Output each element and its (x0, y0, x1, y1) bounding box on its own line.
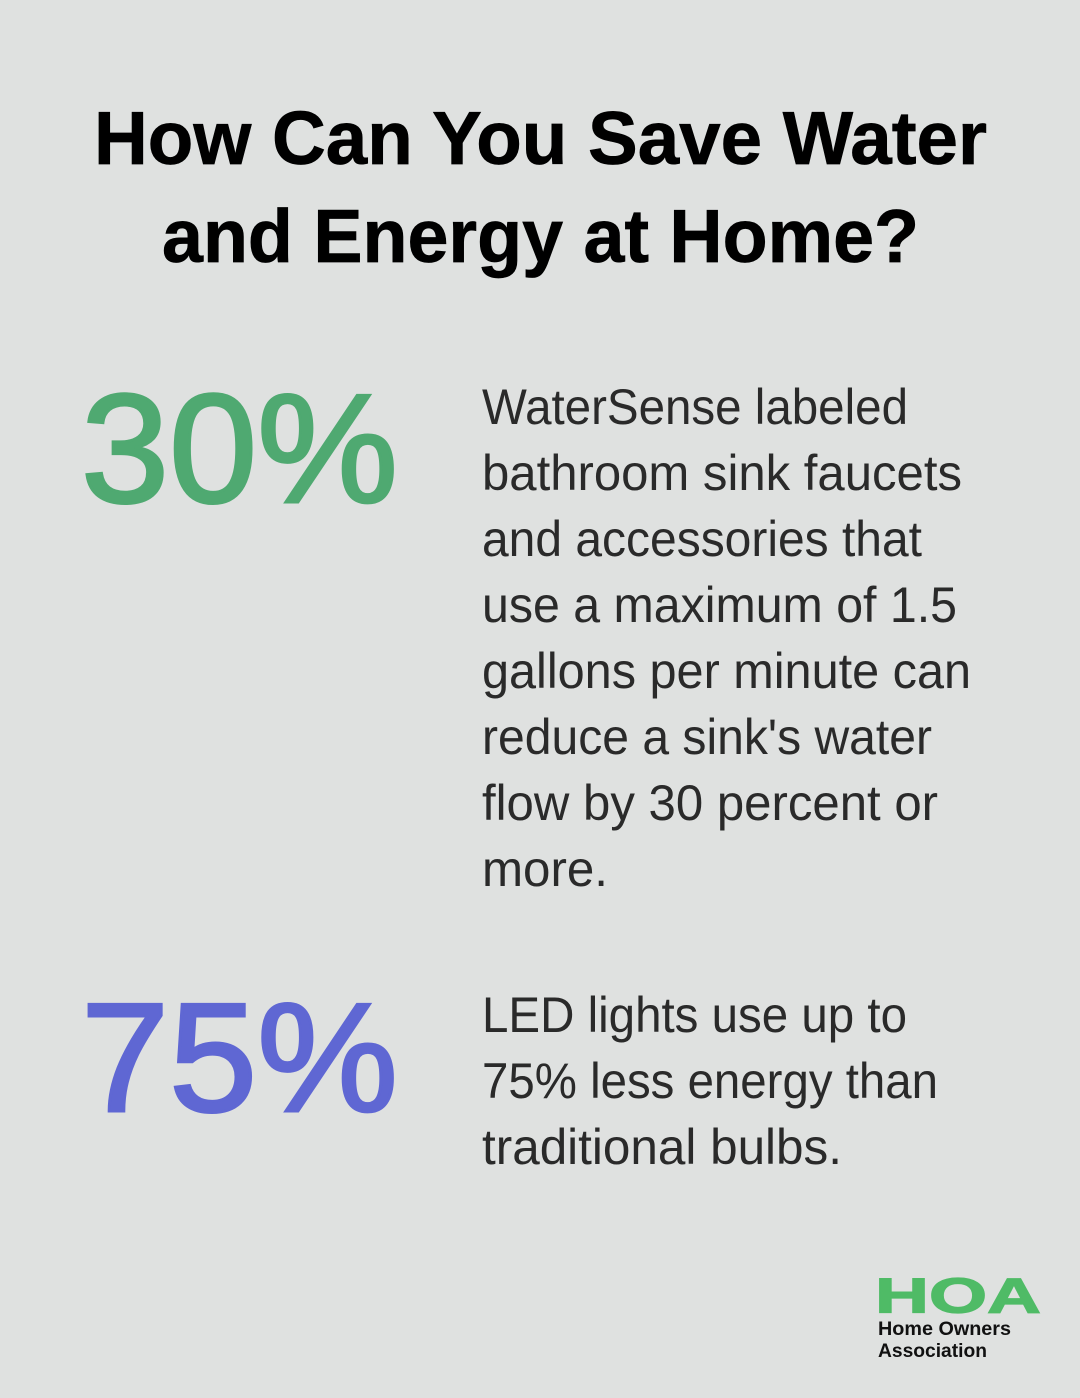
text block: WaterSense description: more. (482, 841, 608, 897)
text block: WaterSense description: flow by 30 percent or (482, 775, 938, 831)
stat: 75%: 75% (81, 971, 398, 1144)
text block: WaterSense description: use a maximum of 1.5 (482, 577, 957, 633)
text block: LED description: 75% less energy than (482, 1053, 938, 1109)
stat: 30%: 30% (81, 362, 398, 535)
title: and Energy at Home? (162, 194, 919, 278)
logo: HOA Home Owners Association: HOA (875, 1270, 1041, 1324)
text block: WaterSense description: and accessories that (482, 511, 922, 567)
text block: WaterSense description: reduce a sink's water (482, 709, 932, 765)
text block: LED description (482, 987, 938, 1175)
text block: LED description: LED lights use up to (482, 987, 907, 1043)
title: How Can You Save Water (94, 96, 987, 180)
text block: WaterSense description: WaterSense labeled (482, 379, 908, 435)
logo: HOA Home Owners Association: Home Owners (878, 1319, 1011, 1340)
text block: WaterSense description (482, 379, 971, 897)
logo: HOA Home Owners Association: Association (878, 1341, 987, 1362)
title (94, 96, 987, 278)
text block: WaterSense description: gallons per minute can (482, 643, 971, 699)
logo: HOA Home Owners Association (875, 1270, 1041, 1362)
text block: LED description: traditional bulbs. (482, 1119, 842, 1175)
text block: WaterSense description: bathroom sink faucets (482, 445, 962, 501)
